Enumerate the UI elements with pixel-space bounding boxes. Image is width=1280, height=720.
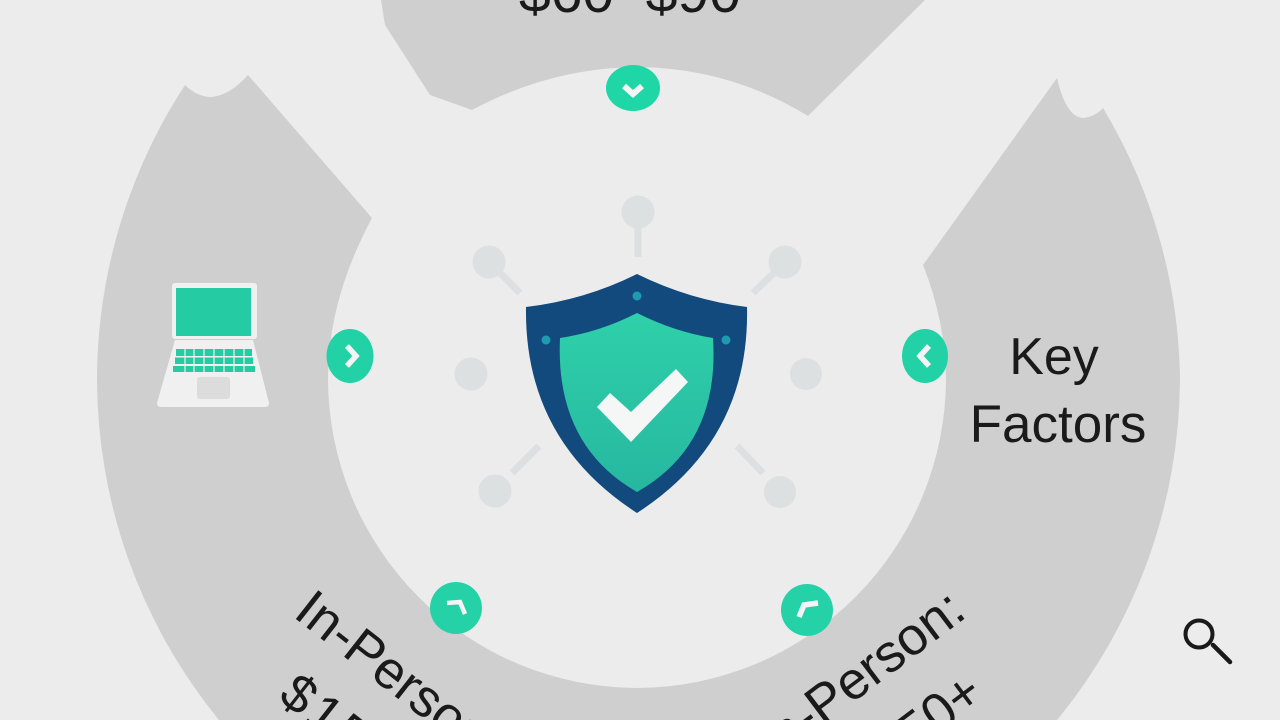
panel: top segment <box>381 0 925 116</box>
button: right arrow <box>902 329 948 383</box>
label: key factors: Factors <box>970 395 1146 454</box>
shield rivets <box>542 292 730 344</box>
button: top arrow <box>606 65 660 111</box>
keyboard <box>173 349 255 372</box>
icon: magnifier <box>1186 620 1230 662</box>
button: lower right arrow <box>781 584 833 636</box>
label: key factors: Key <box>1009 328 1099 386</box>
button: left arrow <box>326 329 374 383</box>
label: key factors <box>970 328 1146 454</box>
button: lower left arrow <box>430 582 482 634</box>
panel: left and bottom ring segment <box>97 75 1180 720</box>
icon: laptop <box>157 283 269 407</box>
check mark <box>597 369 688 442</box>
icon: network nodes <box>454 196 822 508</box>
icon: shield <box>526 274 747 513</box>
